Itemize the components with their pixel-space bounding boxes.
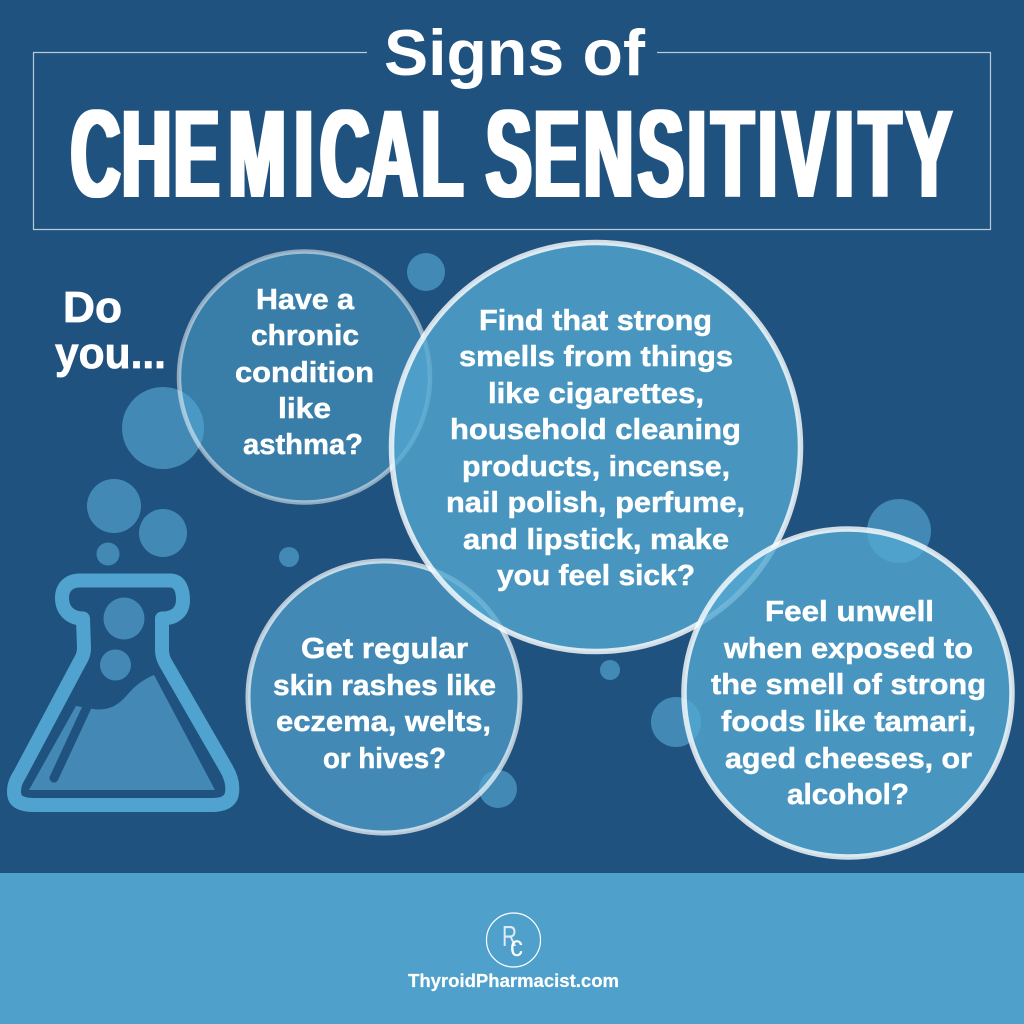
intro text: Do you: Do <box>63 283 122 332</box>
text: strong foods: Feel unwell <box>765 596 934 628</box>
title line: Signs of: Signs of <box>384 16 645 89</box>
text: strong smells: you feel sick? <box>497 560 695 592</box>
footer band <box>0 873 1024 1024</box>
text: strong smells: like cigarettes, <box>488 378 704 410</box>
text: strong foods <box>711 596 986 811</box>
intro text: Do you: you... <box>55 329 166 378</box>
text: strong foods: alcohol? <box>787 779 909 811</box>
text: chronic condition: chronic <box>251 320 359 352</box>
flask liquid <box>29 675 215 790</box>
footer logo: R <box>502 921 517 953</box>
text: skin rashes <box>273 633 496 775</box>
text: strong smells: nail polish, perfume, <box>446 487 745 519</box>
text: strong smells: household cleaning <box>450 414 741 446</box>
footer logo <box>486 913 540 967</box>
title line: Chemical Sensitivity: SENSITIVITY <box>486 85 952 224</box>
text: strong smells: products, incense, <box>462 451 730 483</box>
text: chronic condition <box>235 284 374 461</box>
text: chronic condition: like <box>278 393 331 425</box>
text: strong smells: Find that strong <box>479 305 712 337</box>
title line: Chemical Sensitivity <box>71 85 952 224</box>
text: skin rashes: Get regular <box>301 633 468 665</box>
panel: chronic condition bubble <box>179 252 430 502</box>
title frame <box>34 52 990 230</box>
text: strong smells <box>446 305 745 592</box>
text: skin rashes: eczema, welts, <box>276 706 491 738</box>
text: strong foods: the smell of strong <box>711 669 986 701</box>
footer website: ThyroidPharmacist.com <box>408 971 619 991</box>
text: strong foods: when exposed to <box>723 633 973 665</box>
text: chronic condition: condition <box>235 357 374 389</box>
text: skin rashes: or hives? <box>323 743 446 775</box>
intro text: Do you <box>55 283 166 378</box>
decorative bubbles <box>87 253 931 808</box>
text: strong smells: smells from things <box>459 341 733 373</box>
panel: strong foods bubble <box>684 529 1012 857</box>
text: chronic condition: asthma? <box>243 429 363 461</box>
title <box>71 16 952 224</box>
text: strong foods: foods like tamari, <box>721 706 976 738</box>
flask bubbles <box>104 598 144 640</box>
panel: strong smells bubble <box>392 242 800 652</box>
icon: flask <box>14 580 232 805</box>
flask outline <box>14 580 232 805</box>
text: strong smells: and lipstick, make <box>463 524 729 556</box>
text: chronic condition: Have a <box>256 284 355 316</box>
panel: skin rashes bubble <box>248 561 520 833</box>
footer logo: c <box>510 930 523 963</box>
text: skin rashes: skin rashes like <box>273 670 496 702</box>
text: strong foods: aged cheeses, or <box>725 743 972 775</box>
title line: Chemical Sensitivity: CHEMICAL <box>71 85 463 224</box>
